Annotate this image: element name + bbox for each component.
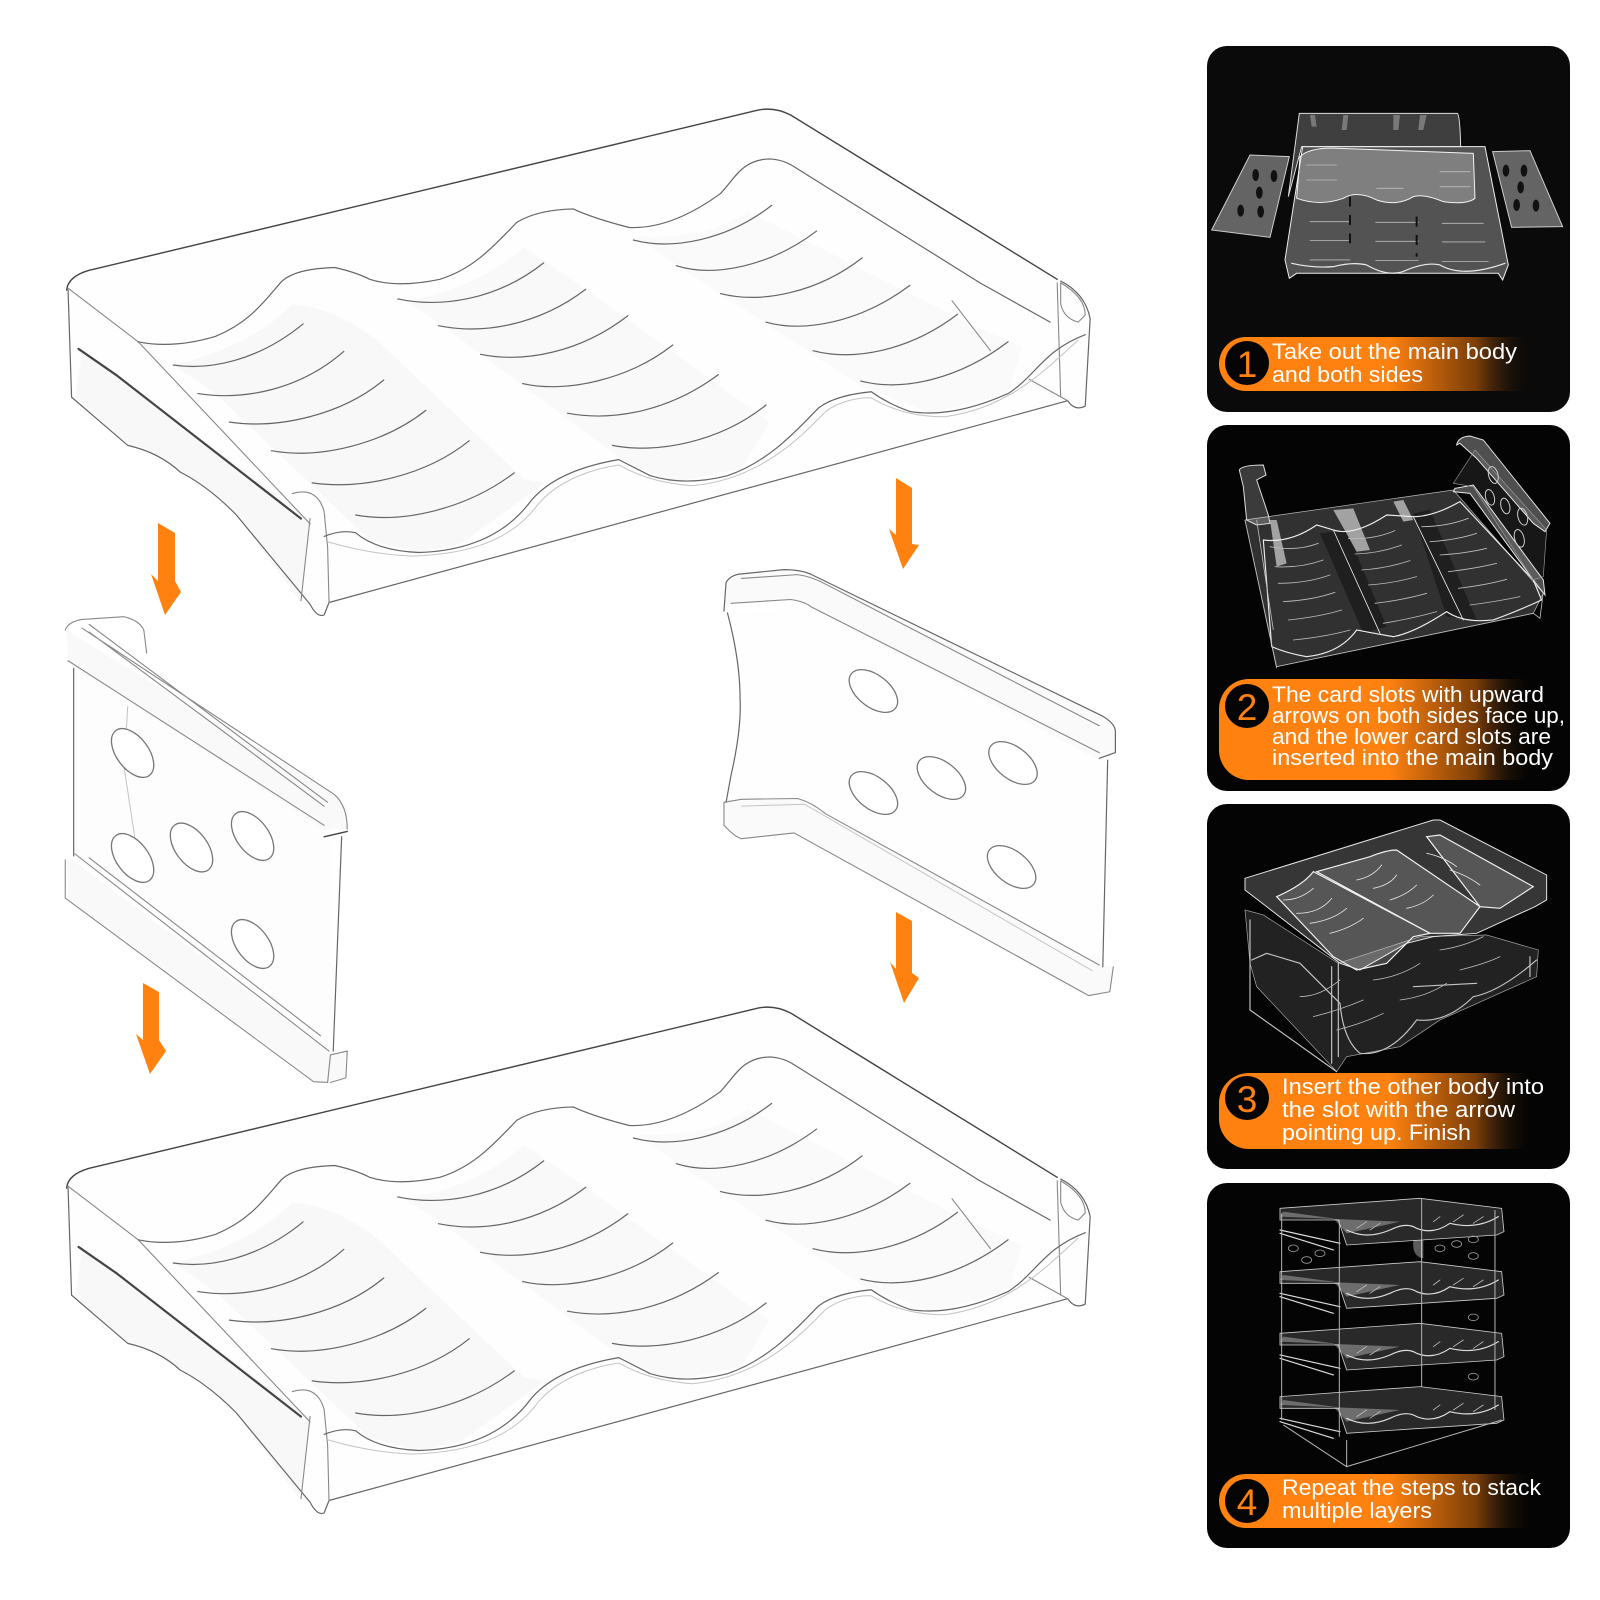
step 2 caption bar: [1219, 679, 1533, 780]
column 2 slots: [398, 263, 766, 448]
step 3 caption: the slot with the arrow: [1282, 1097, 1515, 1122]
step 1 number badge: 1: [1237, 344, 1257, 385]
top tray: main body: [67, 109, 1090, 615]
step 2 photo: panels inserted: [1239, 436, 1550, 668]
step 2 number badge: [1225, 684, 1269, 728]
arrow: top tray to right panel: [889, 478, 919, 569]
step 3 number badge: 3: [1237, 1079, 1257, 1120]
left side panel: [65, 617, 347, 1082]
step 2 caption: [1272, 682, 1565, 770]
back wave edge: [138, 159, 1050, 344]
step 2 caption: and the lower card slots are: [1272, 724, 1551, 749]
right side panel: [724, 570, 1115, 996]
icon: hole: [841, 763, 905, 823]
step 4 photo: four stacked layers: [1280, 1198, 1504, 1467]
step 1 number badge: [1225, 341, 1269, 385]
step 3 caption: Insert the other body into: [1282, 1074, 1544, 1099]
step 2 caption: arrows on both sides face up,: [1272, 703, 1565, 728]
step 3 photo: two stacked layers: [1245, 820, 1547, 1072]
step 3 number badge: [1225, 1076, 1269, 1120]
step 2 caption: inserted into the main body: [1272, 745, 1553, 770]
icon: hole: [980, 837, 1044, 897]
step 3 caption: pointing up. Finish: [1282, 1120, 1471, 1145]
panel: step 4: [1207, 1183, 1570, 1548]
panel: step 3: [1207, 804, 1570, 1169]
icon: hole: [103, 826, 162, 890]
step 1 caption: Take out the main body: [1272, 339, 1517, 364]
step 2 background: [1207, 425, 1570, 791]
step 1 caption: [1272, 339, 1517, 387]
arrow: right panel to bottom tray: [890, 912, 919, 1003]
arrow: left panel to bottom tray: [136, 983, 166, 1074]
icon: hole: [841, 661, 905, 721]
column 1 slots: [173, 324, 514, 517]
icon: hole: [223, 804, 282, 868]
bottom tray: main body: [67, 1007, 1090, 1513]
tray ear with screw hole: [1061, 283, 1085, 322]
arrow: top tray to left panel: [151, 523, 181, 615]
step 4 number badge: [1225, 1479, 1269, 1523]
icon: hole: [103, 721, 162, 785]
step 4 caption: Repeat the steps to stack: [1282, 1475, 1542, 1500]
step 3 caption bar: [1219, 1073, 1533, 1149]
step 1 photo: parts laid out: [1212, 113, 1563, 280]
step 1 caption: and both sides: [1272, 362, 1423, 387]
column 3 slots: [633, 205, 1008, 385]
step 3 background: [1207, 804, 1570, 1169]
panel: step 1: [1207, 46, 1570, 412]
step 4 caption: [1282, 1475, 1542, 1523]
step 4 caption bar: [1219, 1474, 1533, 1528]
icon: hole: [162, 816, 221, 879]
icon: hole: [909, 748, 973, 808]
step 2 caption: The card slots with upward: [1272, 682, 1544, 707]
step 2 number badge: 2: [1237, 687, 1257, 728]
step 3 caption: [1282, 1074, 1544, 1145]
step 4 caption: multiple layers: [1282, 1498, 1432, 1523]
step 1 caption bar: [1219, 337, 1533, 391]
icon: hole: [981, 733, 1045, 793]
step 4 background: [1207, 1183, 1570, 1548]
step 4 number badge: 4: [1237, 1482, 1257, 1523]
front wave edge: [324, 335, 1085, 552]
icon: hole: [223, 912, 282, 976]
panel: step 2: [1207, 425, 1570, 791]
step 1 background: [1207, 46, 1570, 412]
